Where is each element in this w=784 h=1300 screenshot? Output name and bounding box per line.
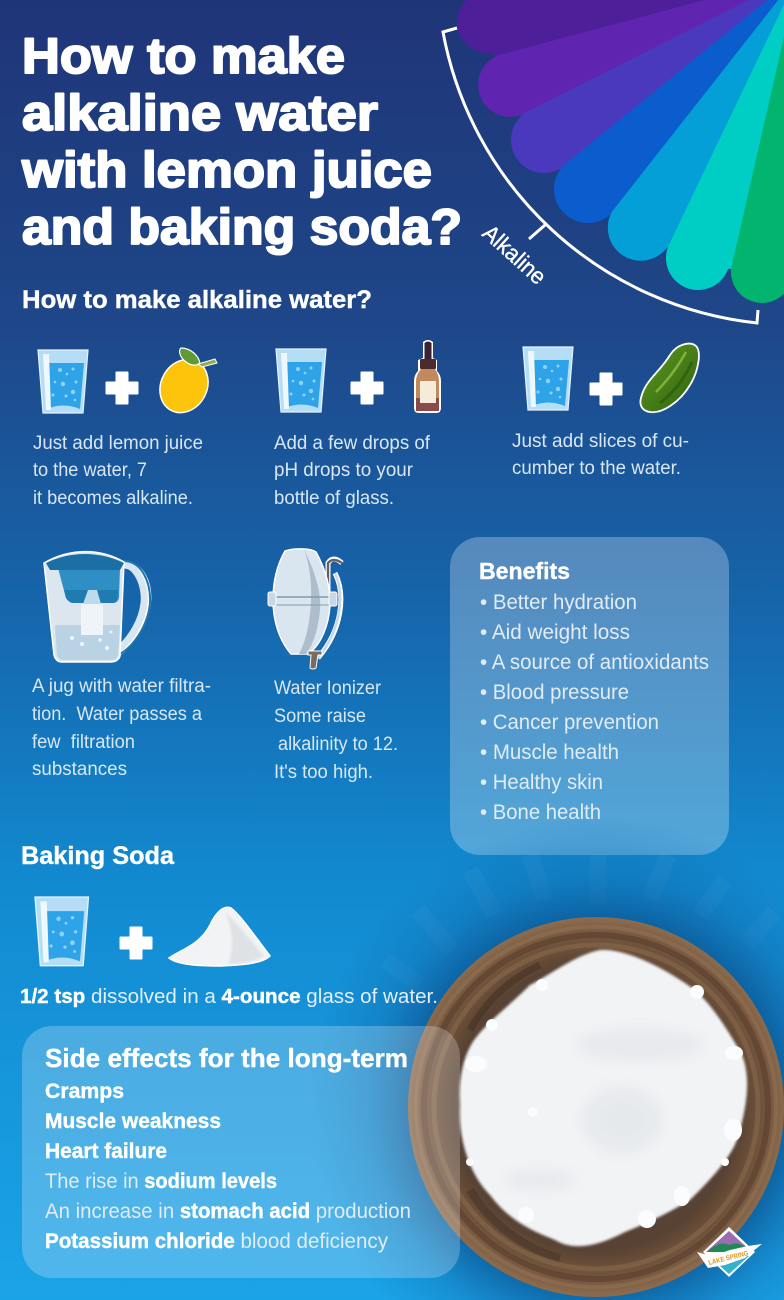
title: and baking soda?	[22, 199, 462, 255]
logo: Lake Spring	[697, 1227, 762, 1277]
icon: filter jug	[44, 552, 150, 662]
benefits list: • Bone health	[480, 801, 601, 824]
panel: benefits	[450, 537, 729, 855]
side effects list	[45, 1080, 411, 1253]
text: water ionizer	[274, 678, 398, 783]
text: lemon: Just add lemon juice	[33, 433, 203, 454]
text: pH drops	[274, 433, 431, 509]
panel: side effects	[22, 1026, 460, 1278]
side effects list: Muscle weakness	[45, 1110, 221, 1133]
text: lemon	[33, 433, 203, 509]
benefits list: • Blood pressure	[480, 681, 629, 704]
text: jug: few filtration	[32, 732, 135, 753]
text: lemon: to the water, 7	[33, 460, 147, 481]
alkaline label: Alkaline	[478, 219, 552, 290]
benefits list: • A source of antioxidants	[480, 651, 709, 674]
text: water ionizer: Water Ionizer	[274, 678, 382, 699]
text: cucumber: cumber to the water.	[512, 458, 681, 479]
text: jug	[32, 676, 211, 780]
text: jug: substances	[32, 759, 127, 780]
heading: how to make alkaline water: How to make alkaline water?	[22, 286, 372, 314]
title: with lemon juice	[21, 142, 432, 198]
text: water ionizer: Some raise	[274, 706, 366, 727]
text: jug: A jug with water filtra-	[32, 676, 211, 697]
benefits list: • Cancer prevention	[480, 711, 659, 734]
heading: baking soda: Baking Soda	[21, 842, 175, 870]
baking soda powder	[460, 950, 747, 1246]
icon: glass with baking soda pile	[35, 897, 270, 966]
icon: glass with cucumber	[523, 344, 699, 412]
photo: bowl of baking soda	[408, 917, 784, 1297]
side effects list: Heart failure	[45, 1140, 167, 1163]
alkaline bracket	[443, 28, 758, 323]
title: alkaline water	[22, 85, 378, 141]
heading: benefits: Benefits	[479, 558, 570, 584]
icon: glass with pH drops	[276, 340, 441, 413]
benefits list: • Aid weight loss	[480, 621, 630, 644]
logo: Lake Spring: LAKE SPRING	[708, 1250, 750, 1267]
side effects list: Potassium chloride blood deficiency	[45, 1230, 388, 1253]
text: pH drops: Add a few drops of	[274, 433, 431, 454]
title	[21, 28, 462, 255]
text: water ionizer: alkalinity to 12.	[278, 734, 398, 755]
benefits list: • Muscle health	[480, 741, 619, 764]
text: jug: tion. Water passes a	[32, 704, 202, 725]
icon: glass with lemon	[38, 348, 217, 421]
text: baking soda dose: 1/2 tsp dissolved in a 4-ounce glass of water.	[20, 986, 438, 1008]
side effects list: An increase in stomach acid production	[45, 1200, 411, 1223]
text: lemon: it becomes alkaline.	[33, 488, 193, 509]
text: water ionizer: It's too high.	[274, 762, 373, 783]
icon: water ionizer	[268, 549, 342, 669]
pH colour fan	[457, 0, 784, 303]
text: pH drops: pH drops to your	[274, 460, 414, 481]
rays behind bowl	[385, 855, 775, 985]
side effects list: Cramps	[45, 1080, 124, 1103]
text: cucumber: Just add slices of cu-	[512, 431, 689, 452]
heading: side effects: Side effects for the long-term	[45, 1043, 408, 1073]
text: cucumber	[512, 431, 689, 479]
text: pH drops: bottle of glass.	[274, 488, 394, 509]
benefits list: • Healthy skin	[480, 771, 603, 794]
benefits list: • Better hydration	[480, 591, 637, 614]
side effects list: The rise in sodium levels	[45, 1170, 277, 1193]
benefits list	[480, 591, 709, 824]
bowl halo	[310, 820, 784, 1300]
title: How to make	[22, 28, 345, 84]
